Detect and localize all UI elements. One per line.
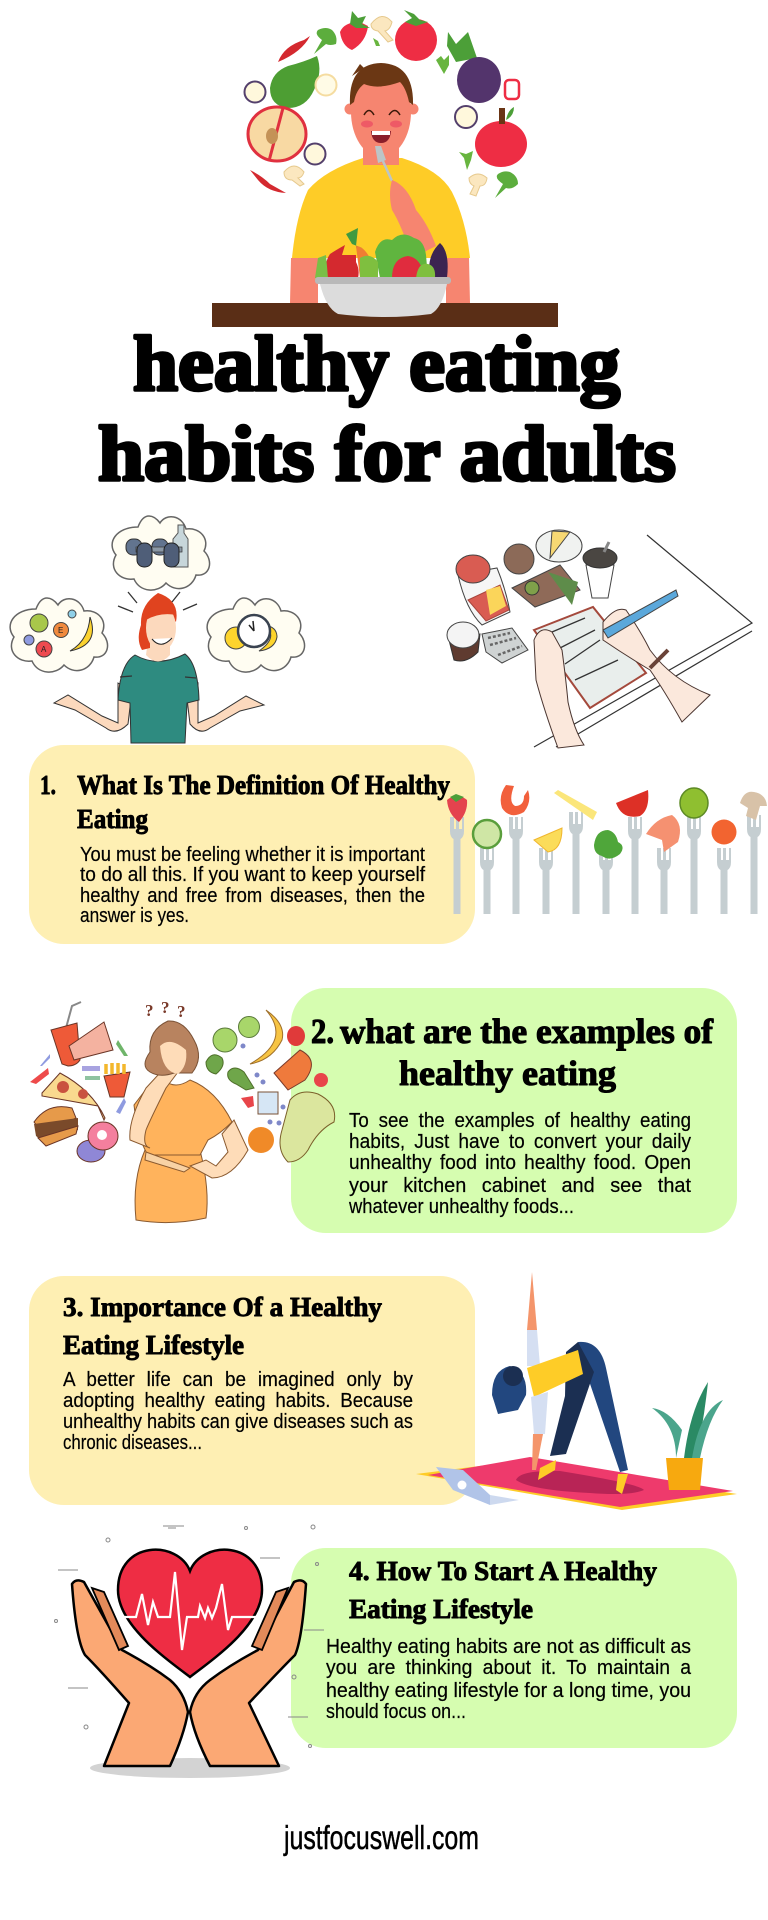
supplement jar (456, 555, 510, 625)
right hand (190, 1580, 306, 1766)
table (212, 303, 558, 327)
bowl, plate and tray (504, 530, 582, 607)
laptop (436, 1467, 519, 1505)
woman (130, 1021, 248, 1223)
plant (652, 1382, 723, 1490)
text block: how to start: should focus on... (326, 1701, 466, 1723)
heading: how to start: Eating Lifestyle (349, 1594, 533, 1624)
yoga mat (416, 1457, 737, 1510)
salad vegetables (315, 228, 448, 278)
salad bowl (315, 277, 451, 317)
title (98, 320, 676, 497)
coffee cup (583, 542, 617, 598)
healthy food (206, 1010, 335, 1162)
stretching person (492, 1272, 628, 1494)
heading: definition: 1. (40, 770, 56, 800)
unhealthy food (30, 1002, 130, 1162)
text block: examples: whatever unhealthy foods... (348, 1196, 574, 1218)
thought cloud: clock (207, 598, 305, 672)
question marks: ? (145, 1001, 154, 1020)
heading: examples: healthy eating (399, 1054, 617, 1093)
pulse line (120, 1572, 260, 1650)
text block: how to start: healthy eating lifestyle for a long time, you (326, 1680, 691, 1702)
food ring (244, 10, 527, 198)
text block: definition: answer is yes. (80, 905, 189, 927)
heading: importance: 3. Importance Of a Healthy (63, 1292, 382, 1322)
heading: definition (40, 770, 450, 834)
question marks: ? (177, 1002, 186, 1021)
text block: examples: To see the examples of healthy eating (349, 1110, 691, 1132)
question marks: ? (161, 998, 170, 1017)
table edge (534, 535, 752, 747)
text block: importance: unhealthy habits can give diseases such as (63, 1411, 413, 1433)
illustration: row of forks with food (447, 785, 767, 914)
thought cloud: exercise (112, 516, 210, 590)
illustration: woman stretching on mat (416, 1272, 737, 1510)
thought cloud: vitamins (10, 598, 108, 672)
woman (54, 592, 264, 743)
small jar and pills (447, 622, 528, 663)
text block: importance: chronic diseases... (63, 1432, 202, 1454)
text block: examples: habits, Just have to convert your daily (349, 1131, 691, 1153)
decorative marks (54, 1525, 324, 1748)
panel: examples of healthy eating (291, 988, 737, 1233)
heading: importance (63, 1292, 382, 1360)
heart (118, 1550, 262, 1677)
illustration: woman weighing diet, exercise and sleep (10, 516, 305, 743)
text block: examples: unhealthy food into healthy food. Open (349, 1152, 691, 1174)
man (290, 63, 470, 303)
text block: importance: adopting healthy eating habits. Because (63, 1390, 413, 1412)
illustration: man eating salad with food ring (212, 10, 558, 327)
illustration: hands holding heart (54, 1525, 324, 1778)
text block: definition: to do all this. If you want to keep yourself (80, 864, 425, 886)
text block: examples: your kitchen cabinet and see that (349, 1175, 691, 1197)
heading: examples: what are the examples of (340, 1012, 713, 1051)
avocado (270, 56, 319, 108)
illustration: hands writing meal plan (447, 530, 752, 748)
thought cloud: vitamins: A (41, 645, 47, 654)
text block: definition: You must be feeling whether it is important (80, 844, 425, 866)
text block: definition (80, 844, 425, 927)
clipboard (534, 607, 646, 708)
heading: how to start: 4. How To Start A Healthy (349, 1556, 657, 1586)
text block: examples (348, 1110, 691, 1218)
heading: how to start (349, 1556, 657, 1624)
food on forks (447, 785, 767, 859)
thought cloud: vitamins: E (58, 626, 63, 635)
text block: definition: healthy and free from diseases, then the (80, 885, 425, 907)
heading: examples (311, 1012, 713, 1093)
text block: how to start: Healthy eating habits are not as difficult as (326, 1636, 691, 1658)
heading: examples: 2. (311, 1012, 334, 1051)
heading: importance: Eating Lifestyle (63, 1330, 244, 1360)
title: habits for adults (98, 410, 676, 497)
fingers over heart (92, 1588, 288, 1650)
text block: importance (63, 1369, 413, 1454)
title: healthy eating (133, 320, 620, 407)
hands and pen (534, 590, 710, 748)
forks (450, 812, 761, 914)
illustration: woman thinking about food (30, 998, 335, 1223)
text block: how to start (326, 1636, 692, 1723)
question marks (145, 998, 186, 1021)
text block: how to start: you are thinking about it. To maintain a (326, 1657, 692, 1679)
footer website: justfocuswell.com (283, 1819, 479, 1856)
panel: importance of healthy eating (29, 1276, 475, 1505)
heading: definition: What Is The Definition Of Healthy (77, 770, 450, 800)
heading: definition: Eating (77, 804, 148, 834)
panel: definition of healthy eating (29, 745, 475, 944)
text block: importance: A better life can be imagined only by (63, 1369, 413, 1391)
left hand (72, 1580, 188, 1766)
panel: how to start (291, 1548, 737, 1748)
shadow (90, 1758, 290, 1778)
